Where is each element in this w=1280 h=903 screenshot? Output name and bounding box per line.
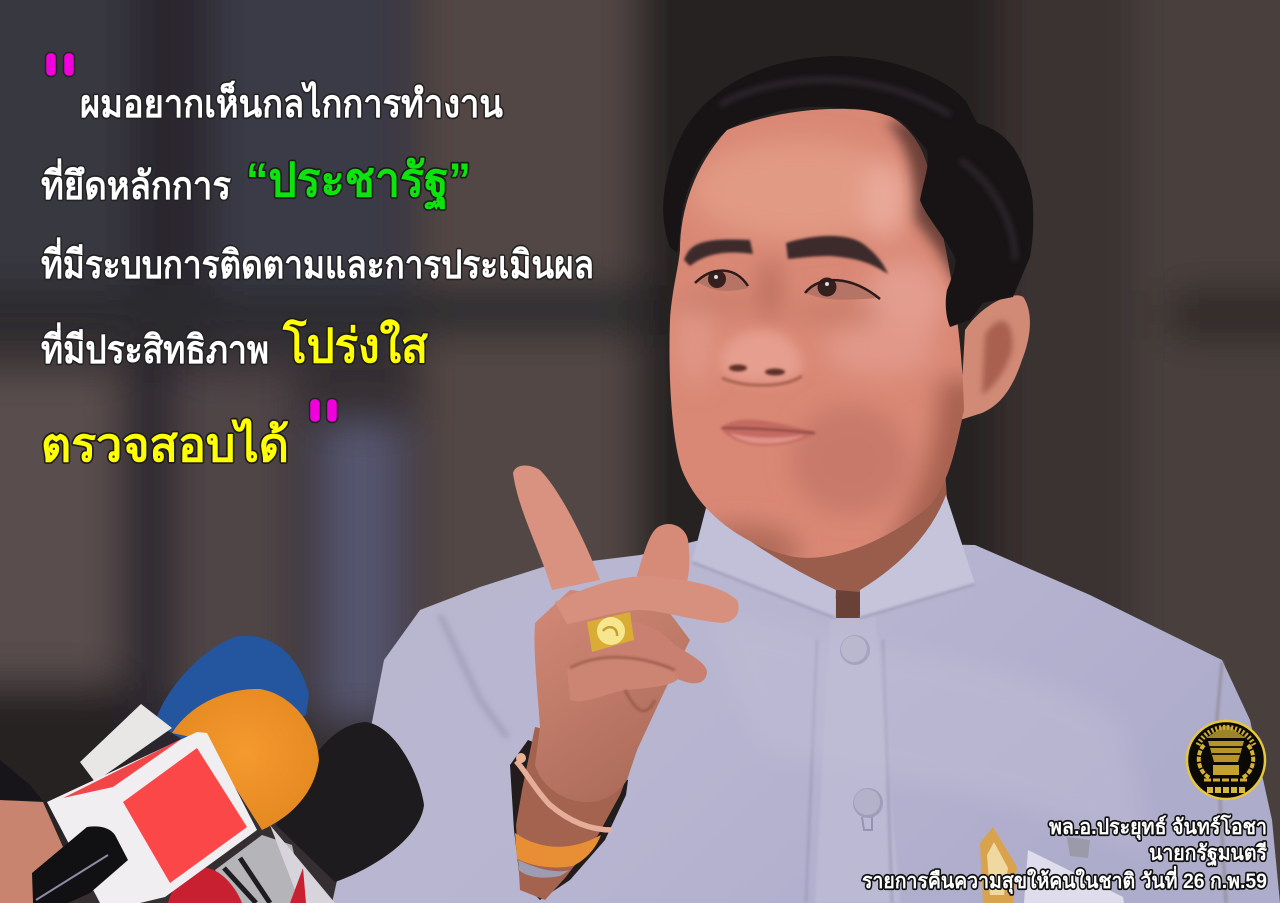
mic: white block bbox=[80, 704, 172, 782]
mic: silver grille bbox=[168, 825, 335, 903]
middle finger bbox=[555, 576, 739, 624]
face shading bbox=[673, 140, 980, 576]
pin and ID badge bbox=[980, 827, 1124, 903]
line 1: ผมอยากเห็นกลไกการทำงาน bbox=[80, 80, 503, 126]
quote text bbox=[41, 52, 594, 471]
mic: orange bbox=[172, 689, 319, 830]
ring finger bbox=[590, 621, 707, 683]
cuff interior dark bbox=[510, 740, 628, 900]
person: hair bbox=[663, 56, 1033, 327]
person: hand bbox=[513, 465, 739, 802]
line 4: ที่มีประสิทธิภาพ bbox=[41, 322, 269, 372]
hand holding mic bbox=[0, 800, 63, 903]
nose bbox=[720, 330, 803, 385]
person: face bbox=[670, 108, 964, 558]
mic: blue bbox=[155, 636, 309, 760]
person: wrist and bracelets bbox=[510, 727, 637, 900]
gold ring bbox=[587, 612, 634, 652]
line 3: ที่มีระบบการติดตามและการประเมินผล bbox=[41, 237, 594, 287]
mic: black handle bbox=[32, 826, 128, 903]
mouth bbox=[720, 420, 817, 446]
speaker title: นายกรัฐมนตรี bbox=[1149, 841, 1268, 867]
closing quote mark bbox=[310, 398, 338, 422]
microphones bbox=[0, 636, 424, 903]
amulet pin bbox=[980, 827, 1017, 903]
highlight: โปร่งใส: โปร่งใส bbox=[282, 318, 428, 372]
person: jacket bbox=[332, 540, 1280, 903]
mic: black bbox=[276, 722, 424, 882]
opening quote mark bbox=[46, 52, 74, 76]
caption: speaker and source bbox=[862, 814, 1268, 895]
gold bracelet bbox=[516, 761, 612, 830]
index finger bbox=[513, 465, 600, 590]
eyes bbox=[695, 270, 880, 300]
thumb bbox=[637, 524, 689, 590]
mic: red and white cube bbox=[47, 732, 257, 903]
seal: Office of the Prime Minister emblem bbox=[1187, 721, 1265, 799]
ID badge bbox=[1024, 850, 1124, 903]
jacket placket bbox=[806, 612, 900, 903]
line 2: ที่ยึดหลักการ bbox=[41, 158, 231, 208]
person: ear bbox=[960, 295, 1030, 420]
person: neck and collar bbox=[692, 470, 975, 618]
wrist bbox=[516, 727, 637, 900]
highlight: ตรวจสอบได้: ตรวจสอบได้ bbox=[41, 417, 289, 471]
speaker name: พล.อ.ประยุทธ์ จันทร์โอชา bbox=[1049, 814, 1267, 841]
little finger bbox=[567, 656, 677, 701]
brows bbox=[684, 236, 888, 274]
temple hair shadow bbox=[882, 116, 951, 286]
highlight: ประชารัฐ: “ประชารัฐ” bbox=[246, 153, 471, 211]
jacket buttons bbox=[840, 635, 883, 830]
orange band bbox=[515, 833, 601, 867]
